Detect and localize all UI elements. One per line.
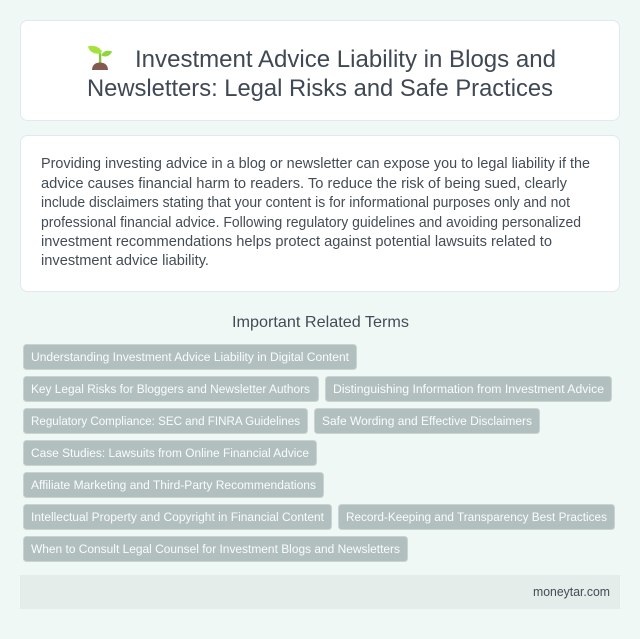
tag: Affiliate Marketing and Third-Party Recommendations: [31, 478, 316, 492]
text block: introduction: advice causes financial harm to readers. To reduce the risk of being sued, clearly: [41, 176, 568, 192]
footer: moneytar.com: [533, 585, 610, 599]
text block: introduction: Providing investing advice in a blog or newsletter can expose you to legal liability if the: [41, 156, 590, 172]
tag: [24, 440, 316, 466]
tag: [24, 472, 324, 498]
footer: [20, 575, 620, 609]
heading: important related terms: Important Related Terms: [232, 314, 409, 331]
icon: seedling: [88, 46, 112, 70]
tag: [24, 376, 318, 402]
tag: [326, 376, 612, 402]
tag: Safe Wording and Effective Disclaimers: [322, 414, 532, 428]
tag: [24, 408, 308, 434]
text block: introduction: professional financial advice. Following regulatory guidelines and avoiding personalized: [41, 215, 581, 231]
tag: [338, 504, 614, 530]
text block: introduction: investment recommendations helps protect against potential lawsuits related to: [41, 234, 552, 250]
panel: title card: [20, 20, 620, 120]
tag: [24, 504, 332, 530]
tag: Intellectual Property and Copyright in Financial Content: [31, 510, 325, 524]
tag: Key Legal Risks for Bloggers and Newsletter Authors: [31, 382, 310, 396]
tag: [24, 536, 408, 562]
text block: introduction: include disclaimers stating that your content is for informational purposes only and not: [41, 195, 570, 211]
text block: introduction: investment advice liability.: [41, 253, 209, 269]
heading: [87, 46, 556, 102]
tag: Regulatory Compliance: SEC and FINRA Guidelines: [31, 414, 300, 428]
tag: [314, 408, 540, 434]
panel: introduction: [20, 136, 620, 292]
tag: Case Studies: Lawsuits from Online Financial Advice: [31, 446, 309, 460]
heading: Investment Advice Liability in Blogs and: [135, 46, 556, 73]
tag: Understanding Investment Advice Liability in Digital Content: [31, 350, 350, 364]
tag list: [24, 344, 614, 562]
heading: Newsletters: Legal Risks and Safe Practices: [87, 75, 553, 102]
tag: Distinguishing Information from Investment Advice: [333, 382, 604, 396]
tag: Record-Keeping and Transparency Best Practices: [346, 510, 607, 524]
text block: introduction: [41, 156, 590, 269]
tag: [24, 344, 356, 370]
tag: When to Consult Legal Counsel for Investment Blogs and Newsletters: [31, 542, 400, 556]
